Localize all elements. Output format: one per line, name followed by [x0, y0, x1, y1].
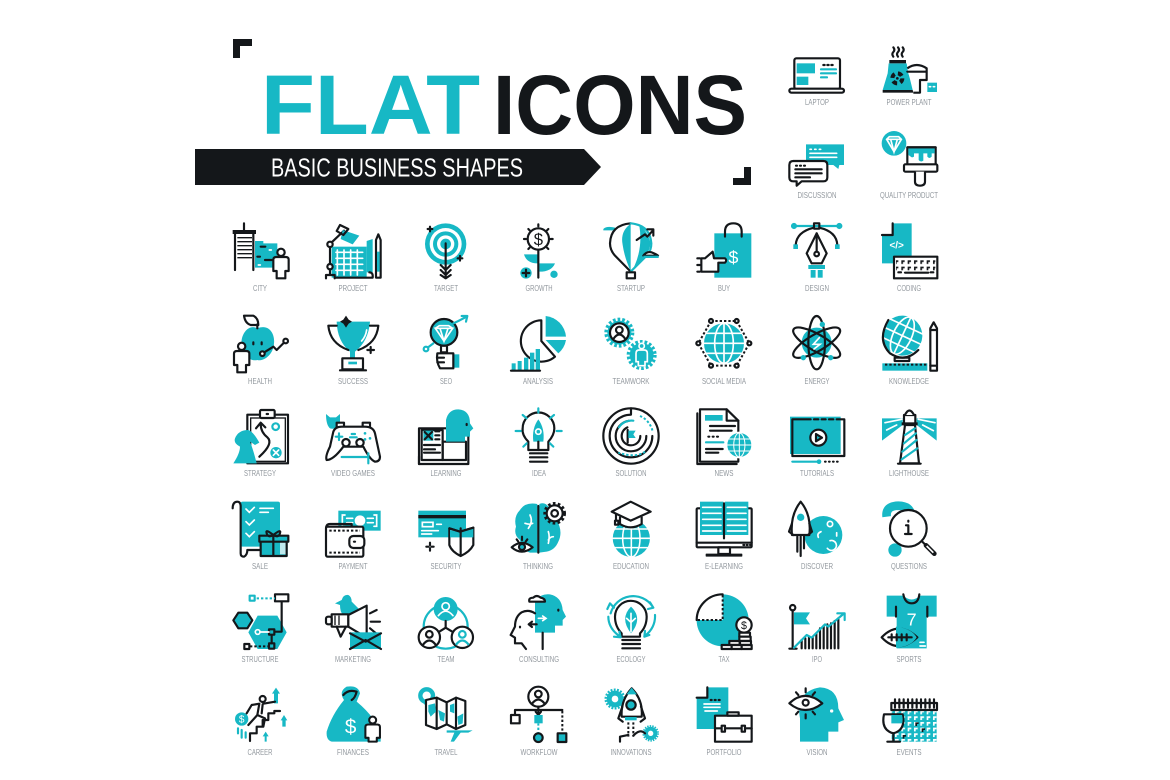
banner	[195, 149, 601, 185]
icon: learning	[419, 409, 473, 464]
icon: travel	[420, 689, 473, 742]
icon: consulting	[511, 594, 566, 649]
icon: ipo	[789, 605, 845, 649]
icon labels: STRUCTURE	[242, 654, 279, 664]
icon labels: STARTUP	[617, 283, 645, 293]
icon labels: TRAVEL	[434, 747, 458, 757]
icon labels: LIGHTHOUSE	[889, 468, 929, 478]
icon: structure	[233, 594, 288, 649]
icon: strategy	[233, 410, 288, 463]
icon: sports	[882, 594, 937, 648]
icon labels: IPO	[812, 654, 822, 664]
icon labels: EVENTS	[896, 747, 922, 757]
icon: buy	[697, 223, 751, 278]
icon: seo	[424, 316, 467, 368]
icon labels: WORKFLOW	[520, 747, 558, 757]
banner: BASIC BUSINESS SHAPES	[271, 152, 523, 182]
icon labels: TARGET	[434, 283, 459, 293]
icon: tax: $	[741, 620, 747, 632]
icon labels: PORTFOLIO	[706, 747, 742, 757]
icon: growth: $	[534, 230, 543, 249]
icon labels: FINANCES	[337, 747, 369, 757]
icon labels: KNOWLEDGE	[889, 376, 929, 386]
icon: tutorials	[790, 417, 844, 464]
icon labels: DISCOVER	[801, 561, 833, 571]
icon labels: CAREER	[248, 747, 272, 757]
icon: marketing	[326, 595, 381, 649]
icon: sports: 7	[907, 610, 917, 630]
icon: events	[883, 699, 937, 742]
icon labels: SEO	[440, 376, 452, 386]
icon: analysis	[511, 316, 566, 371]
icon: career: $	[239, 715, 245, 726]
icon labels: NEWS	[714, 468, 734, 478]
icon: questions	[887, 506, 934, 557]
icon: team	[419, 597, 473, 649]
icon labels: SECURITY	[430, 561, 462, 571]
icon labels: CODING	[897, 283, 921, 293]
icon labels: DISCUSSION	[798, 190, 836, 200]
icon labels: TUTORIALS	[800, 468, 834, 478]
icon: city	[233, 223, 289, 278]
icon grid	[233, 47, 937, 742]
title: FLAT	[261, 58, 480, 152]
icon labels: STRATEGY	[244, 468, 276, 478]
icon labels: GROWTH	[526, 283, 552, 293]
icon: buy: $	[728, 247, 738, 267]
icon: social media	[696, 319, 751, 368]
icon labels: POWER PLANT	[886, 97, 932, 107]
icon labels: MARKETING	[335, 654, 371, 664]
icon labels: SOLUTION	[616, 468, 646, 478]
icon labels: SPORTS	[896, 654, 922, 664]
icon labels: VIDEO GAMES	[331, 468, 375, 478]
icon labels: TEAMWORK	[612, 376, 650, 386]
icon labels	[242, 97, 939, 757]
icon: finances: $	[345, 715, 357, 738]
icon: innovations	[606, 688, 658, 742]
icon labels: SOCIAL MEDIA	[702, 376, 746, 386]
icon labels: THINKING	[523, 561, 553, 571]
icon labels: LEARNING	[430, 468, 462, 478]
icon: sale	[233, 502, 288, 557]
icon labels: SALE	[252, 561, 268, 571]
icon labels: CONSULTING	[519, 654, 559, 664]
icon labels: HEALTH	[248, 376, 272, 386]
icon: knowledge	[876, 309, 937, 371]
icon labels: SUCCESS	[338, 376, 368, 386]
icon: discussion	[789, 144, 844, 186]
icon: laptop	[789, 58, 844, 93]
icon labels: PROJECT	[338, 283, 368, 293]
icon: startup	[603, 223, 659, 278]
icon: payment	[326, 511, 381, 557]
icon labels: QUALITY PRODUCT	[880, 190, 939, 200]
icon: solution	[603, 408, 659, 464]
icon labels: INNOVATIONS	[610, 747, 652, 757]
icon labels: TEAM	[438, 654, 454, 664]
title	[261, 58, 747, 152]
icon: vision	[789, 687, 844, 742]
icon: coding	[882, 223, 937, 278]
icon: lighthouse	[882, 410, 937, 464]
icon labels: ANALYSIS	[523, 376, 553, 386]
icon labels: DESIGN	[805, 283, 829, 293]
icon: video games	[326, 414, 380, 463]
icon: success	[328, 316, 378, 370]
corner mark: top left	[233, 39, 252, 58]
corner mark: bottom right	[733, 167, 751, 185]
icon labels: PAYMENT	[338, 561, 368, 571]
icon: quality product	[882, 131, 937, 186]
icon: growth	[520, 224, 558, 279]
icon labels: LAPTOP	[805, 97, 829, 107]
icon labels: ENERGY	[804, 376, 830, 386]
icon: discover	[789, 502, 842, 556]
icon labels: E-LEARNING	[705, 561, 743, 571]
icon: power plant	[883, 47, 937, 93]
icon: ecology	[607, 596, 655, 648]
icon: news	[697, 409, 753, 464]
icon labels: QUESTIONS	[891, 561, 927, 571]
icon labels: CITY	[253, 283, 267, 293]
icon: thinking	[512, 503, 565, 553]
icon labels: BUY	[718, 283, 730, 293]
icon labels: ECOLOGY	[616, 654, 646, 664]
icon: finances	[327, 686, 381, 742]
icon: target	[425, 223, 466, 278]
icon labels: VISION	[806, 747, 828, 757]
icon: project	[326, 225, 381, 278]
icon: security	[418, 511, 473, 556]
icon labels: TAX	[718, 654, 730, 664]
icon labels: EDUCATION	[613, 561, 649, 571]
icon: tax	[697, 594, 752, 649]
title: ICONS	[493, 58, 747, 152]
icon: education	[612, 502, 651, 557]
icon: coding: </>	[889, 240, 904, 251]
icon: career	[235, 688, 287, 742]
icon: teamwork	[606, 319, 655, 368]
icon: idea	[516, 408, 562, 462]
icon: design	[792, 223, 841, 278]
icon: e-learning	[697, 502, 752, 557]
icon labels: IDEA	[532, 468, 546, 478]
icon: portfolio	[697, 687, 752, 742]
icon: energy	[789, 316, 844, 369]
icon: workflow	[511, 687, 566, 742]
icon: health	[234, 316, 288, 372]
